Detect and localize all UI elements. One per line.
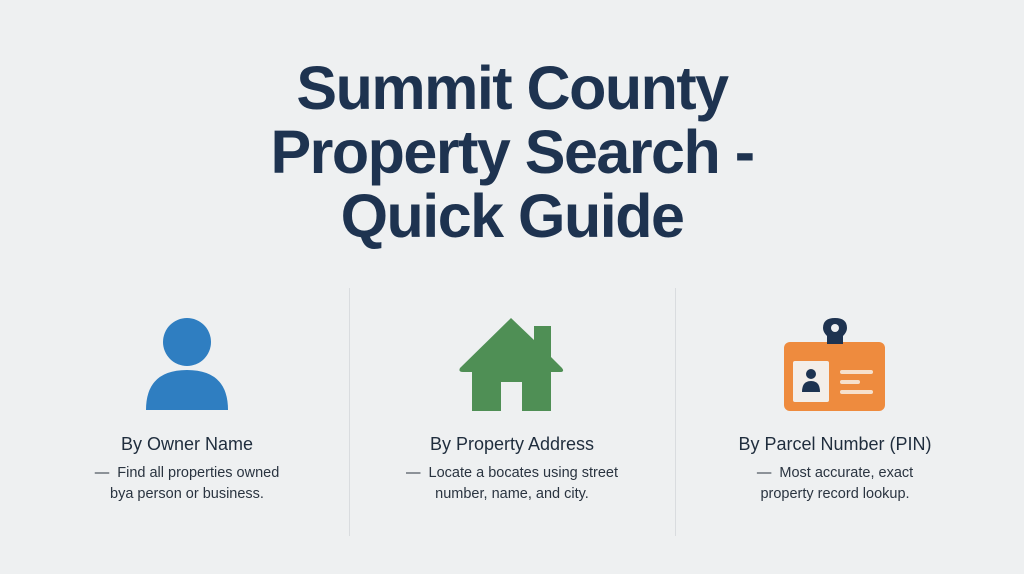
title: Summit County xyxy=(296,54,728,122)
text: parcel xyxy=(756,465,914,502)
heading: parcel number: By Parcel Number (PIN) xyxy=(738,434,932,454)
text: address: — Locate a bocates using street xyxy=(406,465,618,481)
title: Quick Guide xyxy=(341,182,683,250)
icon: parcel card xyxy=(784,318,885,411)
heading: owner name: By Owner Name xyxy=(121,434,253,454)
icon: person xyxy=(146,318,228,410)
text: parcel: — Most accurate, exact xyxy=(757,465,913,481)
text: owner: bya person or business. xyxy=(110,486,264,502)
text: parcel: property record lookup. xyxy=(760,486,910,502)
text: owner: — Find all properties owned xyxy=(95,465,279,481)
text: address: number, name, and city. xyxy=(435,486,589,502)
icon: house xyxy=(459,318,564,411)
title xyxy=(270,54,754,250)
text: owner xyxy=(94,465,279,502)
title: Property Search - xyxy=(270,118,754,186)
heading: address: By Property Address xyxy=(430,434,594,454)
text: address xyxy=(406,465,618,502)
